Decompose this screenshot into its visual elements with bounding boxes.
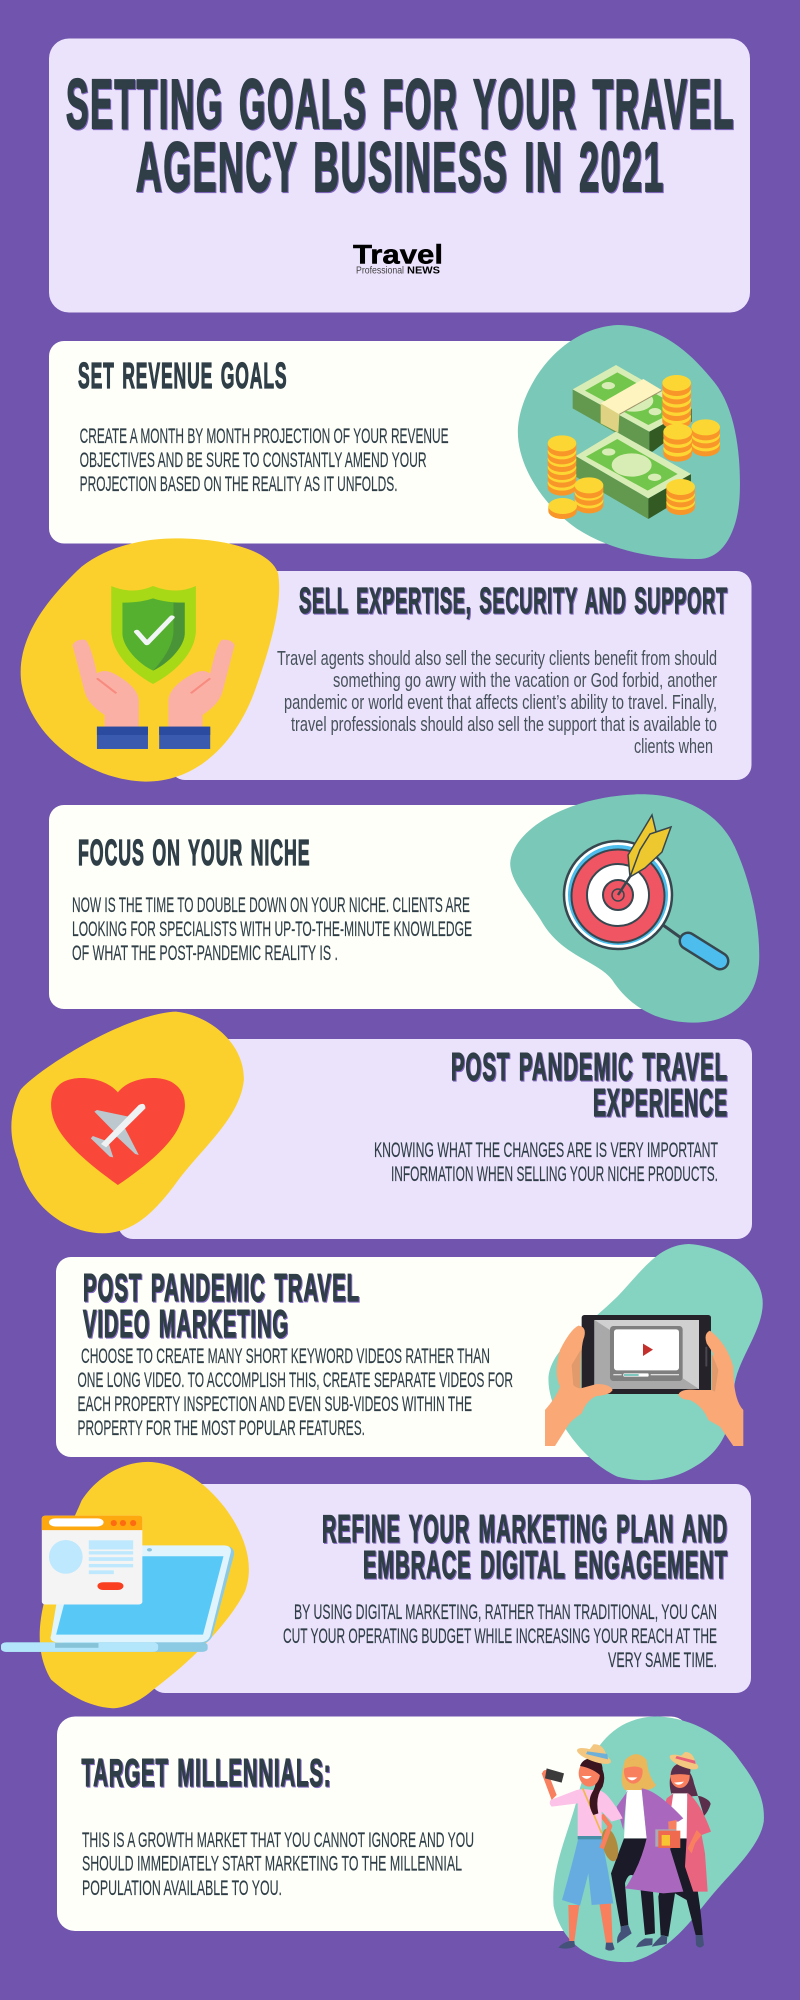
logo: Travel Professional News: Professional (356, 266, 404, 276)
body text: PROPERTY FOR THE MOST POPULAR FEATURES. (78, 1417, 365, 1440)
blob: yellow laptop background (40, 1462, 249, 1708)
body text: NOW IS THE TIME TO DOUBLE DOWN ON YOUR NICHE. CLIENTS ARE (72, 894, 470, 917)
body text: OBJECTIVES AND BE SURE TO CONSTANTLY AMEND YOUR (80, 449, 427, 472)
blob: teal target background (510, 794, 759, 1023)
body text (283, 1601, 717, 1672)
panel: sell expertise, security and support (21, 538, 751, 782)
icon: laptop with web page (1, 1516, 234, 1652)
icon: heart with airplane (51, 1078, 185, 1185)
heading (322, 1508, 728, 1587)
blob: yellow heart background (11, 1012, 244, 1233)
body text (78, 1345, 513, 1440)
icon: money and coins (548, 365, 720, 519)
woman in the middle (611, 1754, 683, 1947)
panel: focus on your niche: FOCUS ON YOUR NICHE (78, 832, 310, 873)
panel: title (49, 38, 750, 312)
blob: teal tablet background (548, 1244, 763, 1480)
body text (82, 1829, 474, 1900)
body text: THIS IS A GROWTH MARKET THAT YOU CANNOT IGNORE AND YOU (82, 1829, 474, 1852)
body text: EACH PROPERTY INSPECTION AND EVEN SUB-VIDEOS WITHIN THE (78, 1393, 472, 1416)
body text: VERY SAME TIME. (608, 1649, 717, 1672)
heading: TARGET MILLENNIALS: (82, 1752, 332, 1795)
body text (277, 648, 717, 758)
body text (80, 425, 449, 496)
body text: OF WHAT THE POST-PANDEMIC REALITY IS . (72, 942, 338, 965)
blob: teal people background (553, 1716, 764, 1962)
logo: Travel Professional News: NEWS (407, 266, 440, 276)
panel: focus on your niche (49, 794, 759, 1023)
panel: video marketing (56, 1244, 763, 1480)
body text: LOOKING FOR SPECIALISTS WITH UP-TO-THE-MINUTE KNOWLEDGE (72, 918, 472, 941)
body text: CREATE A MONTH BY MONTH PROJECTION OF YOUR REVENUE (80, 425, 449, 448)
icon: hands holding tablet (545, 1315, 743, 1446)
heading: POST PANDEMIC TRAVEL (83, 1267, 360, 1310)
panel: set revenue goals (49, 325, 740, 559)
heading: VIDEO MARKETING (83, 1303, 289, 1346)
logo: Travel Professional News: Travel (353, 240, 443, 270)
illustration: three travelling women (542, 1744, 711, 1951)
panel: set revenue goals: SET REVENUE GOALS (78, 355, 288, 396)
panel: target millennials (57, 1716, 764, 1962)
icon: hands holding shield (72, 586, 235, 749)
body text: SHOULD IMMEDIATELY START MARKETING TO THE MILLENNIAL (82, 1853, 462, 1876)
blob: teal money background (518, 325, 740, 559)
woman on the left taking a selfie (542, 1744, 623, 1951)
icon: target with arrow and magnifier (564, 815, 720, 961)
title (66, 65, 735, 206)
body text: PROJECTION BASED ON THE REALITY AS IT UNFOLDS. (80, 473, 398, 496)
heading (451, 1046, 728, 1125)
blob: yellow shield background (21, 538, 279, 782)
woman on the right (652, 1752, 711, 1947)
heading (83, 1267, 360, 1346)
body text: clients when (634, 736, 713, 758)
panel: refine your marketing plan (1, 1462, 751, 1708)
body text (374, 1139, 718, 1186)
panel: post pandemic travel experience (11, 1012, 752, 1239)
body text (72, 894, 472, 965)
body text: CHOOSE TO CREATE MANY SHORT KEYWORD VIDEOS RATHER THAN (81, 1345, 490, 1368)
body text: POPULATION AVAILABLE TO YOU. (82, 1877, 282, 1900)
